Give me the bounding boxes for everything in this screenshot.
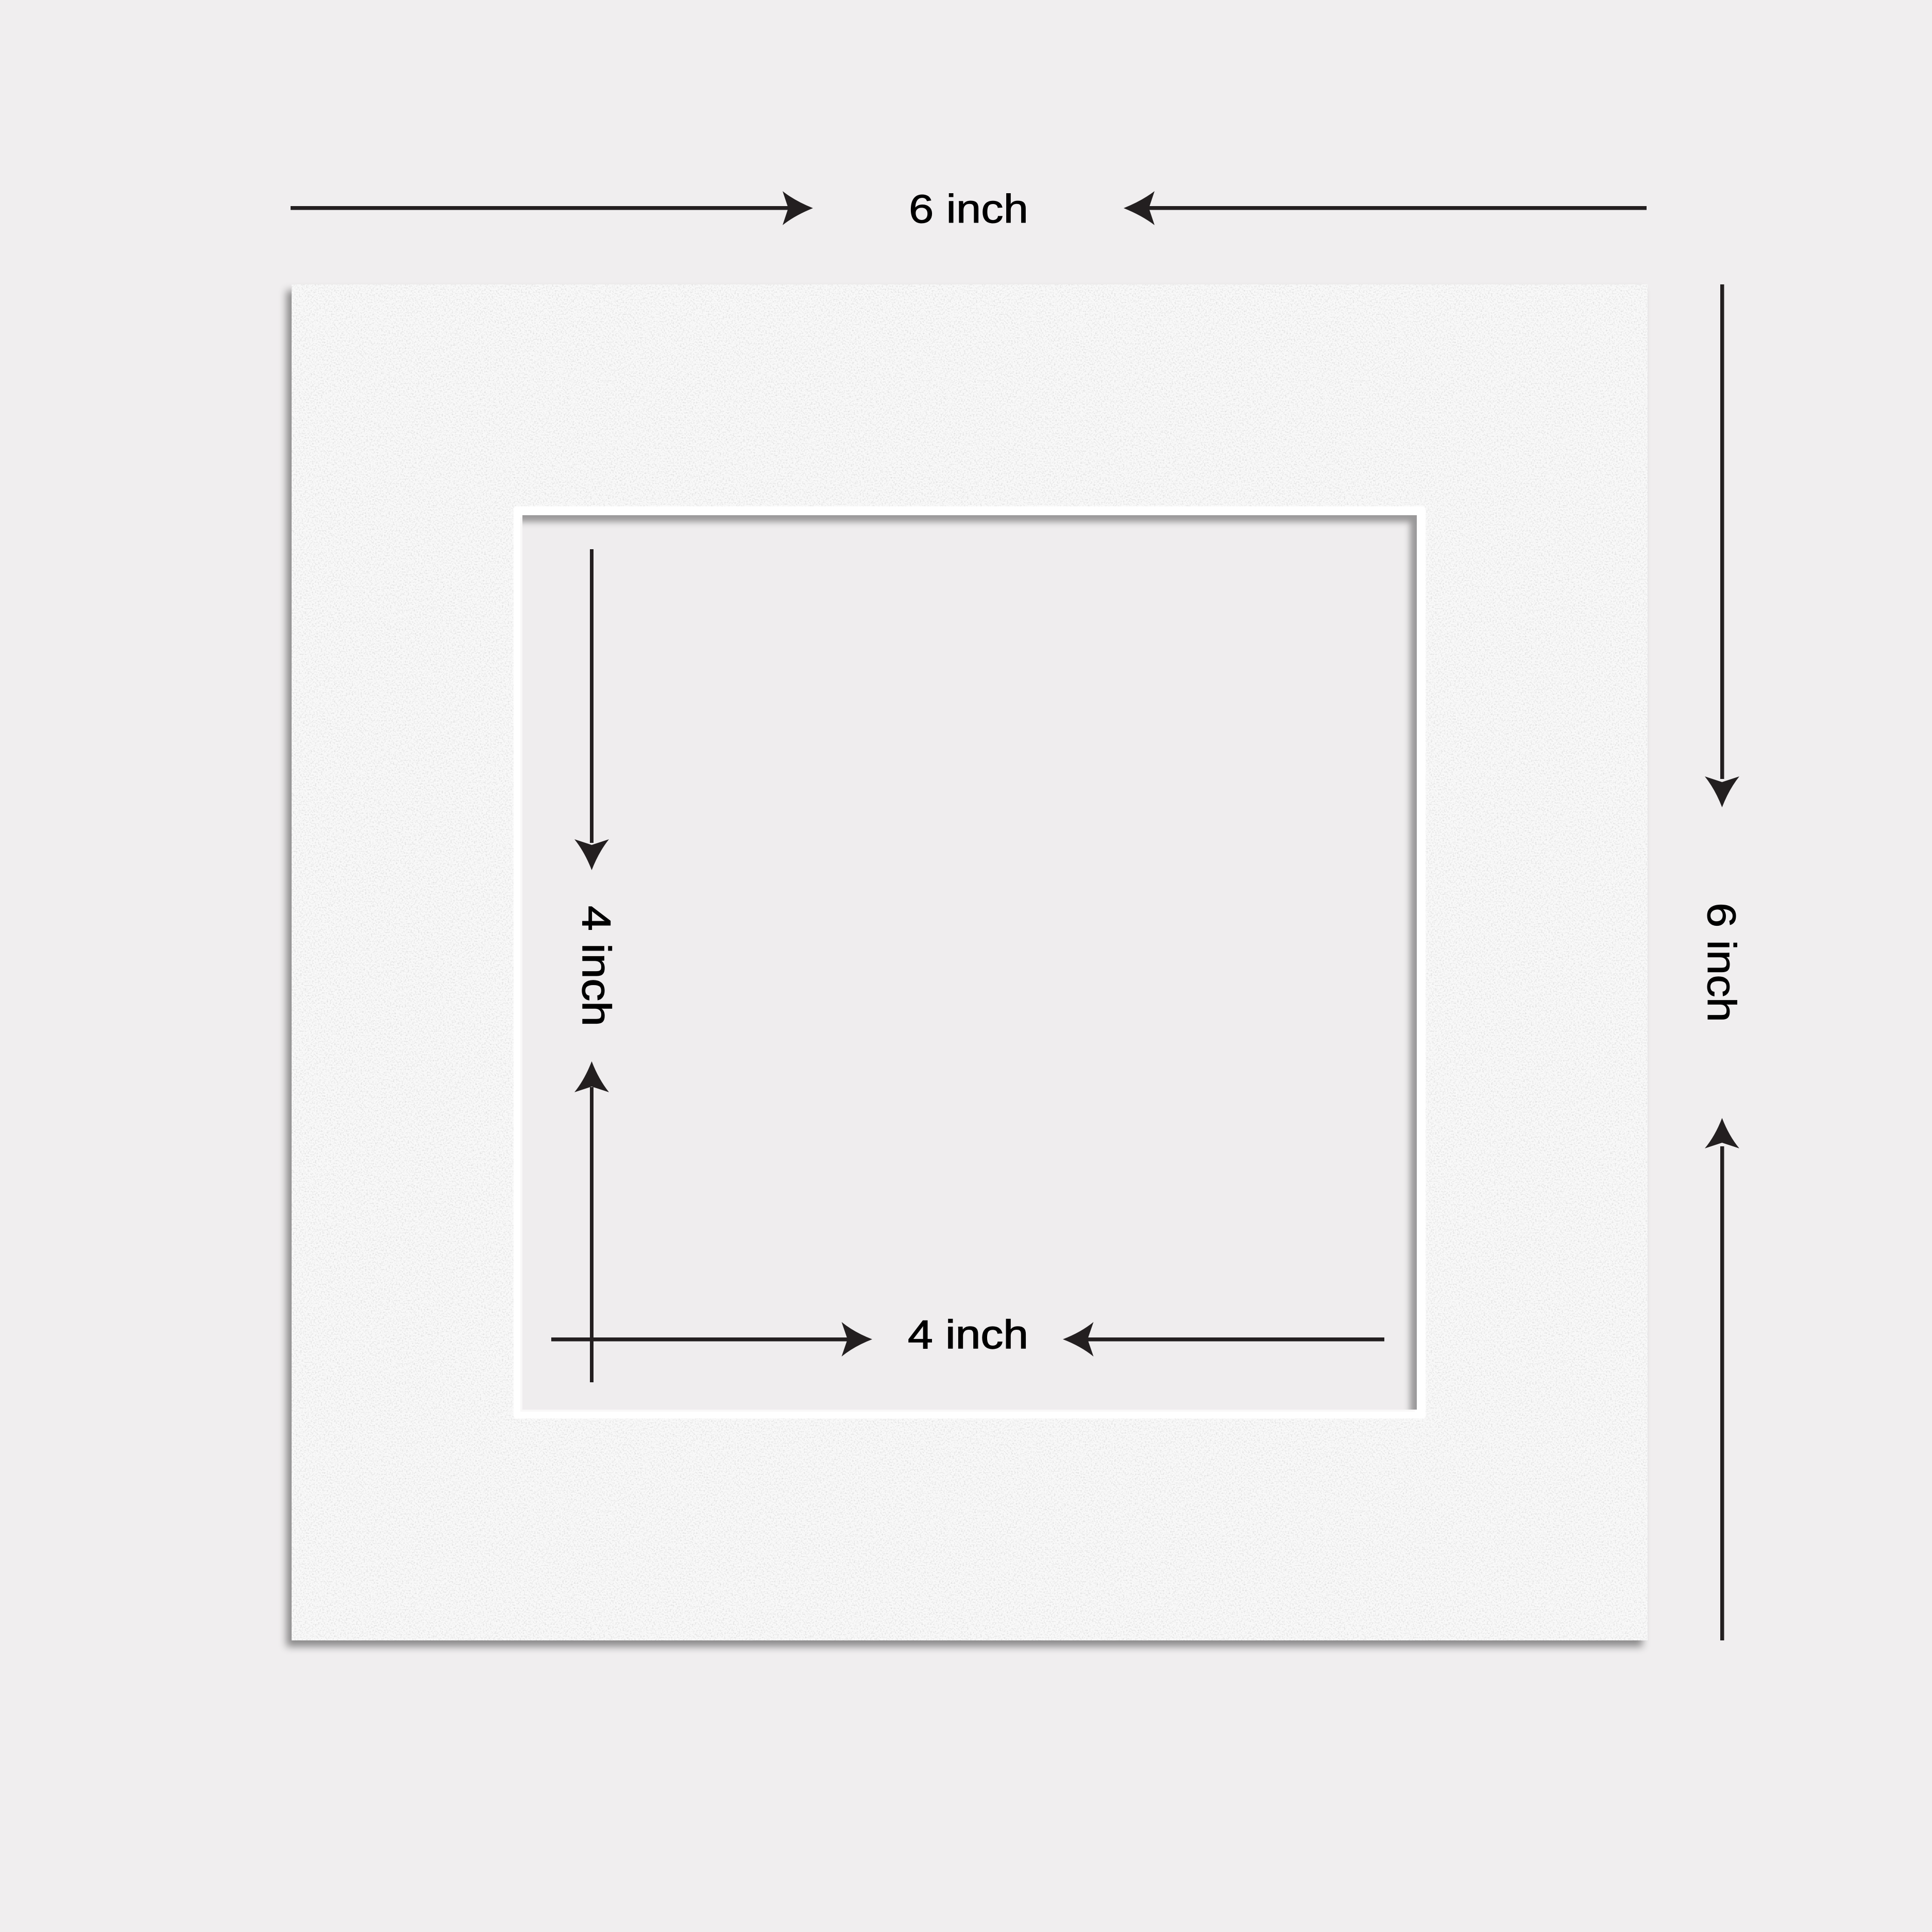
mat opening: white bevel edge — [514, 506, 1426, 1418]
arrow: right outer height, pointing down — [1705, 284, 1739, 807]
arrow: top outer width, pointing right — [291, 191, 813, 225]
arrow: right outer height, pointing up — [1705, 1118, 1739, 1640]
label: outer height 6 inch: 6 inch — [1699, 903, 1744, 1022]
arrow: inner height, pointing down — [574, 549, 609, 870]
label: outer width 6 inch: 6 inch — [909, 186, 1028, 231]
arrow: top outer width, pointing left — [1124, 191, 1647, 225]
panel: white photo mat board — [292, 284, 1648, 1640]
arrow: inner height, pointing up — [574, 1061, 609, 1382]
mat opening: window with inner shadow — [522, 515, 1417, 1410]
label: inner width 4 inch: 4 inch — [908, 1312, 1028, 1357]
arrow: inner width, pointing right — [551, 1322, 872, 1357]
arrow: inner width, pointing left — [1063, 1322, 1384, 1357]
label: inner height 4 inch: 4 inch — [574, 906, 619, 1026]
